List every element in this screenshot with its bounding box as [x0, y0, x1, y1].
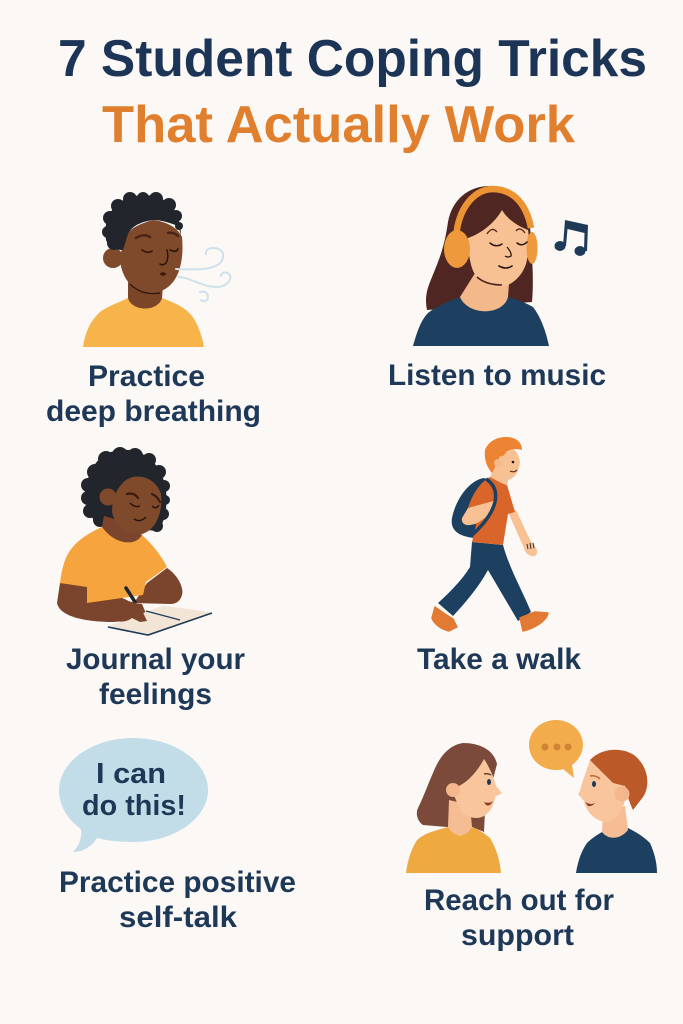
- icon: breath swirls: [176, 248, 230, 301]
- label: practice positive self-talk: [59, 866, 296, 934]
- label: reach out for support: Reach out for: [424, 884, 614, 917]
- hair: [102, 192, 183, 250]
- icon: notebook: [108, 606, 212, 635]
- label: practice deep breathing: deep breathing: [46, 395, 261, 428]
- head: [492, 445, 520, 480]
- title: That Actually Work: [102, 96, 575, 154]
- near arm: [462, 500, 497, 525]
- hair: [81, 447, 170, 532]
- label: practice positive self-talk: Practice positive: [59, 866, 296, 899]
- panel: reach out for support: [406, 720, 657, 952]
- panel: take a walk: [417, 437, 581, 676]
- icon: music note: [554, 220, 588, 256]
- icon: person with headphones: [413, 186, 588, 346]
- label: reach out for support: support: [461, 919, 574, 952]
- backpack strap: [472, 479, 496, 535]
- panel: listen to music: [388, 186, 606, 392]
- title: 7 Student Coping Tricks: [58, 30, 647, 88]
- title: [58, 30, 647, 154]
- panel: journal your feelings: [57, 447, 245, 711]
- label: reach out for support: [424, 884, 614, 952]
- shirt: [468, 477, 515, 545]
- icon: speech bubble: [59, 738, 208, 852]
- icon: woman talking: [406, 743, 502, 873]
- icon: speech bubble: do this!: [82, 790, 186, 822]
- shoes: [432, 607, 457, 631]
- backpack: [452, 478, 496, 538]
- label: practice positive self-talk: self-talk: [119, 901, 237, 934]
- label: practice deep breathing: Practice: [88, 360, 205, 393]
- label: listen to music: Listen to music: [388, 359, 606, 392]
- far arm: [508, 510, 537, 556]
- icon: person journaling: [57, 447, 212, 635]
- icon: breathing person: [83, 192, 230, 347]
- icon: pen: [126, 588, 135, 602]
- label: journal your feelings: Journal your: [66, 643, 245, 676]
- trousers: [438, 542, 531, 621]
- icon: man talking: [576, 750, 657, 873]
- label: take a walk: Take a walk: [417, 643, 581, 676]
- icon: chat bubble: [529, 720, 583, 778]
- label: practice deep breathing: [46, 360, 261, 428]
- label: journal your feelings: [66, 643, 245, 711]
- panel: deep breathing: [46, 192, 261, 428]
- icon: speech bubble: I can: [96, 758, 166, 790]
- icon: walking person: [432, 437, 548, 631]
- label: journal your feelings: feelings: [99, 678, 212, 711]
- panel: positive self-talk: [59, 738, 296, 934]
